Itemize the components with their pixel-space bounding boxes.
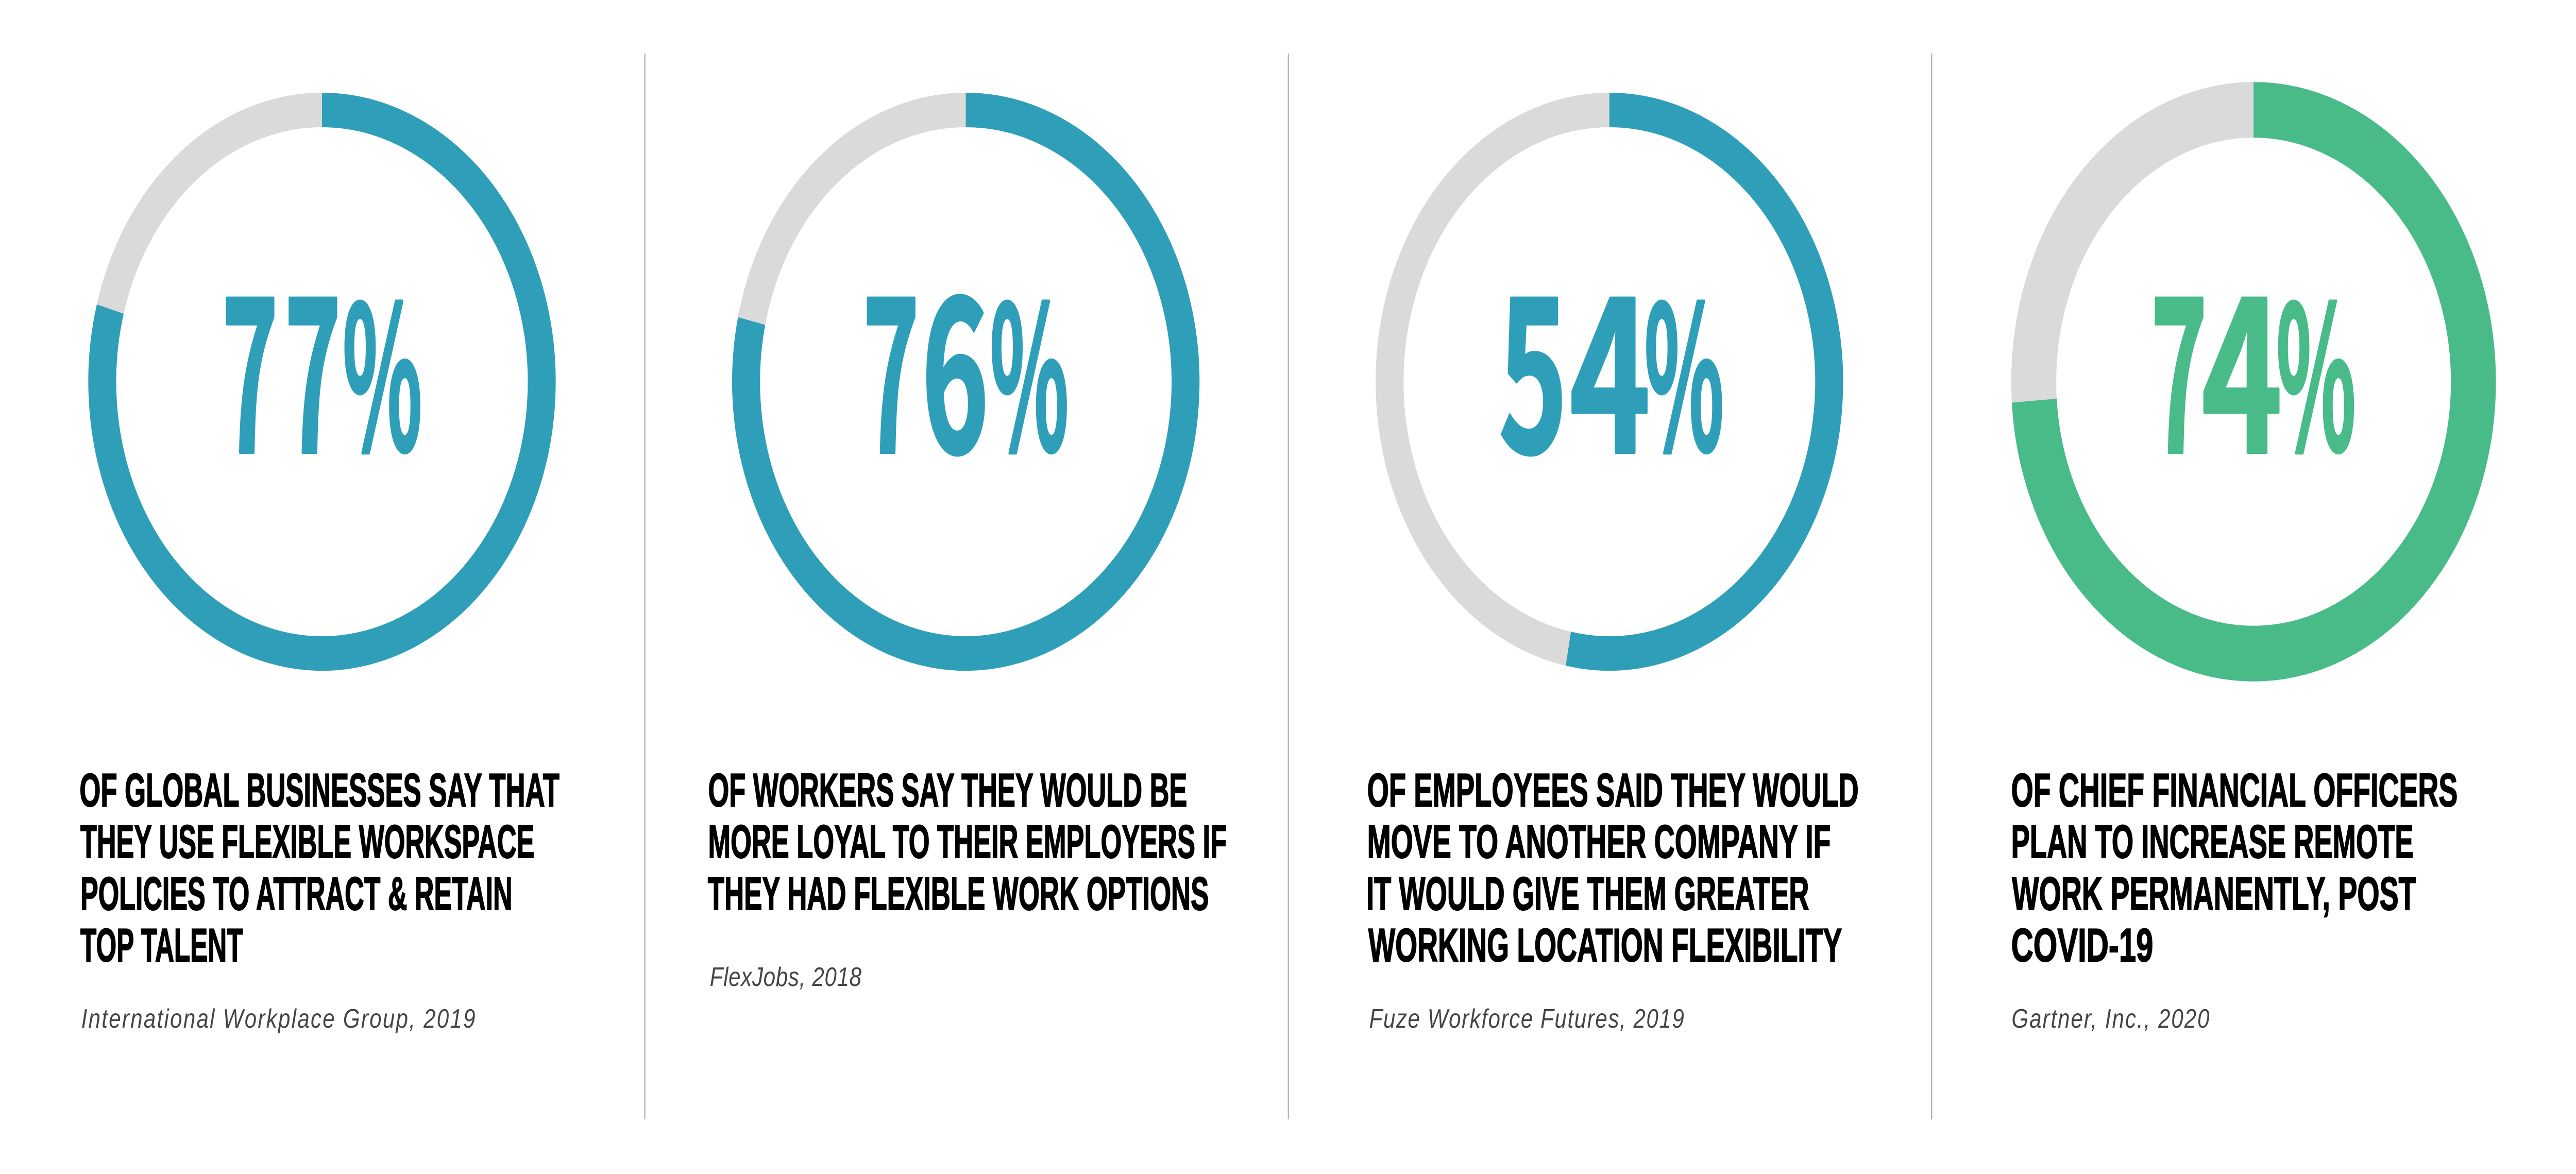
statement text: MORE LOYAL TO THEIR EMPLOYERS IF	[708, 815, 1227, 868]
stat: 54%: 4	[1570, 211, 1650, 513]
stat: 76%: %	[990, 221, 1069, 507]
source: FlexJobs, 2018	[710, 962, 862, 992]
stat: 74%: 4	[2201, 211, 2282, 513]
panel: 77% global businesses	[79, 110, 560, 1034]
statement text: WORK PERMANENTLY, POST	[2012, 867, 2416, 920]
stat: 77%: %	[343, 221, 422, 507]
donut chart: 77%	[102, 110, 542, 653]
statement text	[79, 764, 560, 972]
panel: 54% employees	[1366, 110, 1859, 1034]
stat: 54%: %	[1644, 221, 1724, 507]
panel: 76% workers	[708, 110, 1227, 992]
stat: 74%: 7	[2150, 211, 2207, 513]
statement text: PLAN TO INCREASE REMOTE	[2011, 815, 2414, 868]
donut chart: 76%	[746, 110, 1185, 653]
statement text: OF EMPLOYEES SAID THEY WOULD	[1367, 764, 1859, 816]
source: Fuze Workforce Futures, 2019	[1369, 1004, 1684, 1034]
statement text: THEY USE FLEXIBLE WORKSPACE	[80, 815, 534, 868]
statement text: POLICIES TO ATTRACT & RETAIN	[80, 867, 513, 920]
source: Gartner, Inc., 2020	[2011, 1004, 2209, 1034]
stat: 77%: 7	[222, 211, 278, 513]
donut chart: 54%	[1389, 110, 1829, 653]
statement text: WORKING LOCATION FLEXIBILITY	[1368, 919, 1842, 972]
statement text: MOVE TO ANOTHER COMPANY IF	[1367, 815, 1831, 868]
statement text: OF WORKERS SAY THEY WOULD BE	[708, 764, 1187, 816]
stat: 77%: 7	[284, 211, 341, 513]
statement text: COVID-19	[2011, 919, 2153, 972]
statement text	[1366, 764, 1859, 972]
stat: 76%: 7	[862, 211, 919, 513]
statement text: IT WOULD GIVE THEM GREATER	[1366, 867, 1809, 920]
stat: 74%: %	[2276, 221, 2356, 507]
statement text: OF GLOBAL BUSINESSES SAY THAT	[79, 764, 560, 816]
donut chart: 74%	[2033, 110, 2473, 654]
stat: 54%: 5	[1499, 211, 1568, 513]
source: International Workplace Group, 2019	[81, 1004, 476, 1034]
statement text: TOP TALENT	[80, 919, 243, 972]
panel: 74% chief financial officers	[2011, 110, 2473, 1034]
statement text	[708, 764, 1227, 920]
statement text: THEY HAD FLEXIBLE WORK OPTIONS	[708, 867, 1209, 920]
stat: 76%: 6	[921, 211, 989, 513]
statement text	[2011, 764, 2458, 972]
